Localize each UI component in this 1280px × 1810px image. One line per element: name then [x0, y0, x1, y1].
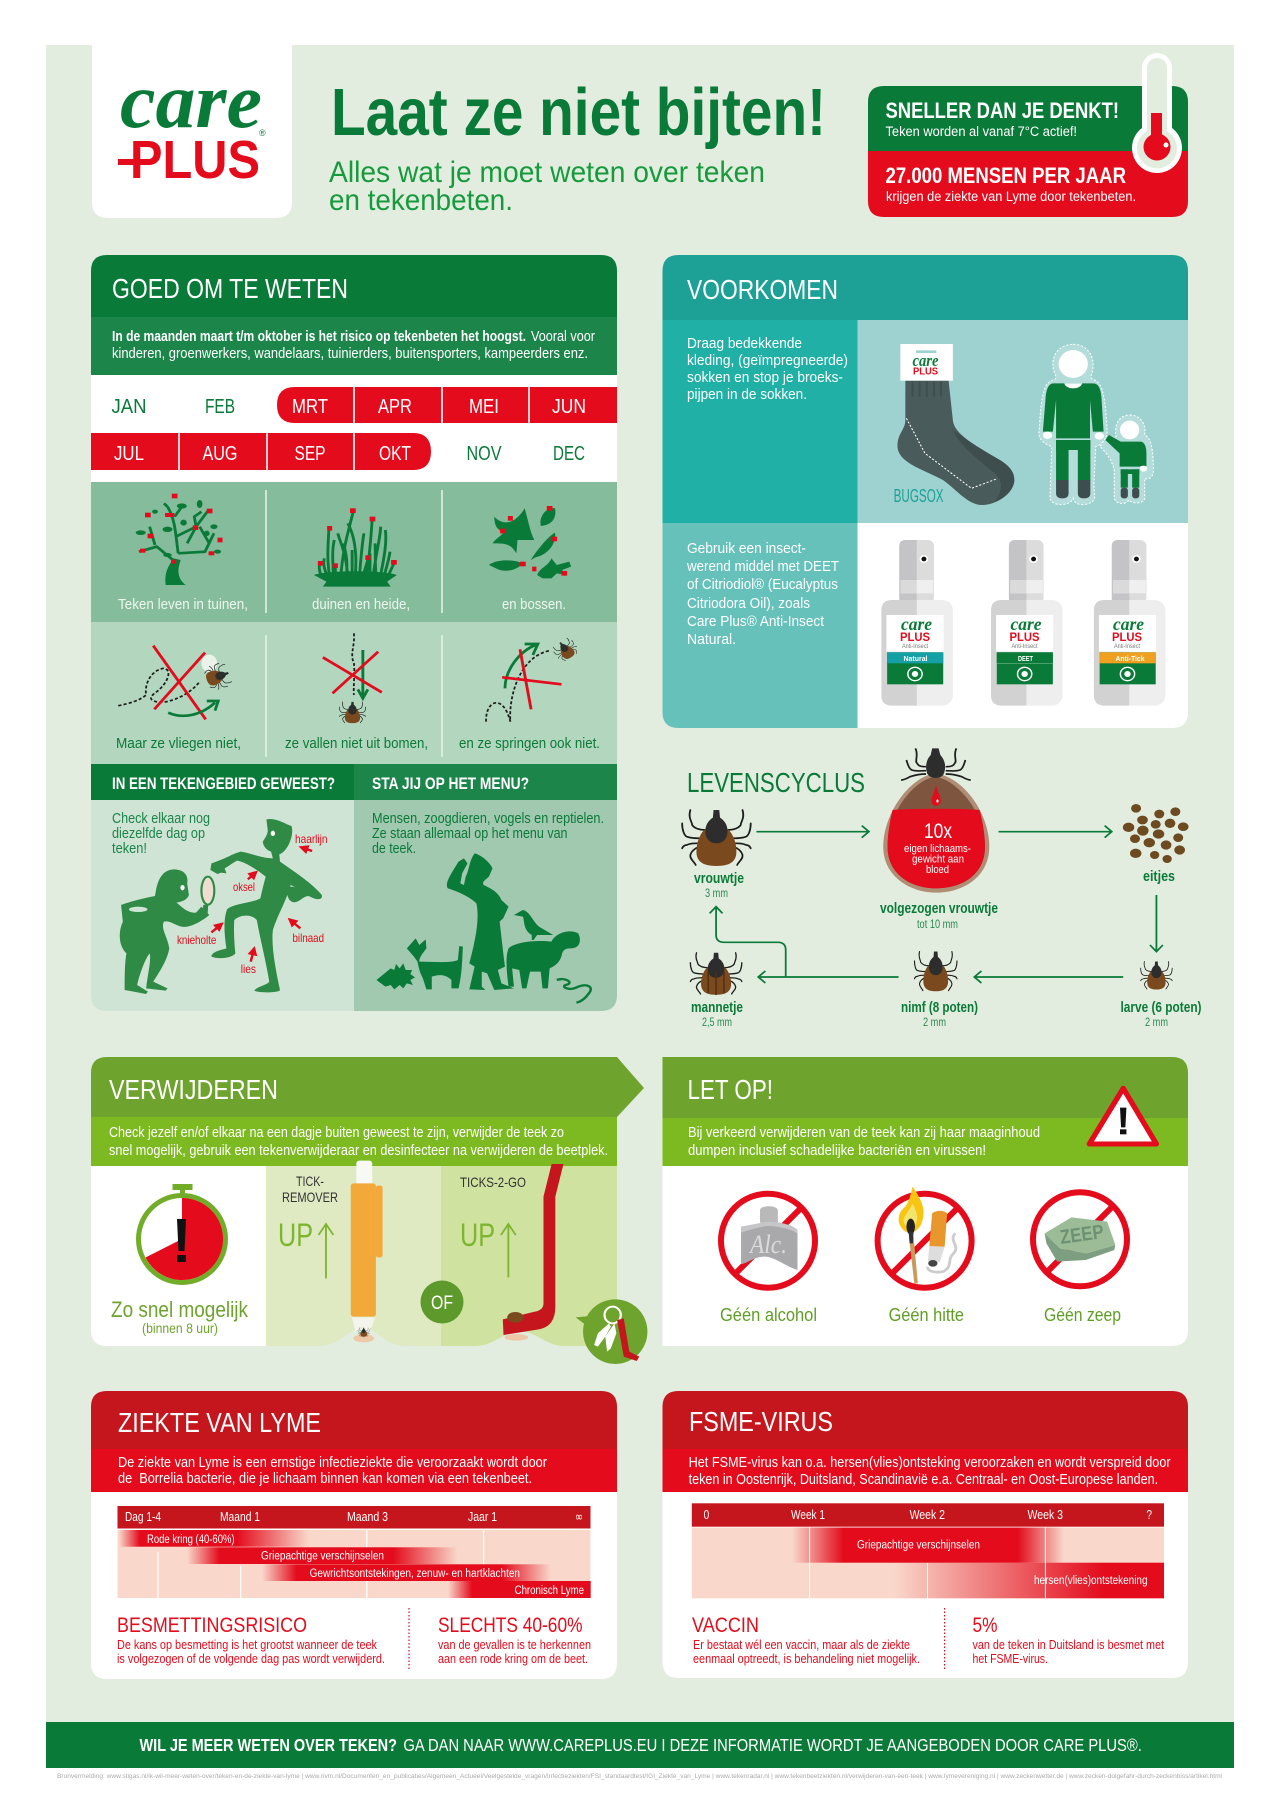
label row: where ticks live	[118, 596, 566, 613]
label row: what ticks do not do	[116, 735, 600, 752]
tool: tick remover: UP	[278, 1217, 313, 1253]
text block: risk months	[112, 329, 595, 362]
labels: do not use	[720, 1304, 1121, 1325]
illustration: bottle anti-tick: Anti-Tick	[1116, 654, 1145, 663]
illustration: bottle deet: care	[1010, 614, 1042, 634]
tool: tick remover	[278, 1161, 383, 1342]
chart: lyme timeline: Gewrichtsontstekingen, zenuw- en hartklachten	[310, 1568, 520, 1580]
icon: no heat	[878, 1187, 972, 1288]
icon: no alcohol: Alc.	[748, 1230, 787, 1259]
icon: ticks do not jump	[486, 637, 580, 722]
subpanel: sta jij op het menu: Mensen, zoogdieren, vogels en reptielen.	[372, 811, 604, 827]
illustration: bottle deet: Anti-Insect	[1012, 644, 1038, 650]
tool: ticks-2-go: UP	[460, 1217, 495, 1253]
text: zo snel mogelijk	[111, 1297, 249, 1336]
logo card: Care Plus: ®	[259, 128, 266, 138]
stage labels: 3 mm	[705, 886, 728, 900]
illustration: bottle anti-tick	[1094, 540, 1165, 706]
chart: lyme timeline: Griepachtige verschijnselen	[261, 1550, 384, 1562]
chart: fsme timeline: hersen(vlies)ontstekening	[1034, 1575, 1148, 1587]
illustration: bugsox sock: PLUS	[913, 366, 938, 378]
subtitle: Alles wat je moet weten over teken	[329, 156, 765, 189]
text block: risk months: Vooral voor	[531, 329, 595, 345]
stage labels: eitjes	[1143, 869, 1175, 885]
callout: temperature and Lyme figures	[868, 53, 1188, 217]
chart: month calendar: DEC	[553, 443, 585, 465]
text block: fsme description: teken in Oostenrijk, Duitsland, Scandinavië e.a. Centraal- en Oost-Europese landen.	[689, 1472, 1158, 1488]
text block: clothing advice: Draag bedekkende	[687, 335, 802, 352]
chart: month calendar: AUG	[202, 443, 238, 465]
icon: grass with ticks	[314, 508, 397, 587]
badge: of	[420, 1280, 464, 1324]
chart: fsme timeline: 0	[704, 1507, 709, 1522]
subpanel: in een tekengebied geweest: diezelfde dag op	[112, 826, 205, 842]
text block: warning	[688, 1125, 1040, 1159]
body part labels: knieholte	[177, 933, 217, 947]
footer banner: GA DAN NAAR WWW.CAREPLUS.EU I DEZE INFORMATIE WORDT JE AANGEBODEN DOOR CARE PLUS®.	[403, 1735, 1142, 1755]
icon: stopwatch	[138, 1184, 226, 1282]
text block: repellent advice: werend middel met DEET	[686, 558, 839, 575]
subpanel: sta jij op het menu: Ze staan allemaal op het menu van	[372, 826, 568, 842]
chart: fsme timeline: Week 3	[1028, 1507, 1063, 1522]
text block: repellent advice: Citriodora Oil), zoals	[687, 595, 810, 612]
illustration: two people checking for ticks	[120, 819, 322, 994]
chart: month calendar: MRT	[292, 396, 328, 418]
label row: what ticks do not do: Maar ze vliegen niet,	[116, 735, 241, 752]
stage labels: tot 10 mm	[917, 917, 958, 931]
heading: verwijderen: VERWIJDEREN	[109, 1074, 278, 1105]
heading: fsme-virus: FSME-VIRUS	[689, 1406, 833, 1437]
footer banner	[46, 1722, 1234, 1768]
text block: clothing advice: sokken en stop je broeks-	[687, 369, 843, 386]
label row: where ticks live: en bossen.	[502, 596, 566, 613]
panel: verwijderen	[91, 1057, 647, 1364]
illustration: bottle natural: PLUS	[900, 630, 930, 644]
title: Laat ze niet bijten!	[331, 75, 826, 150]
fact: 5%: 5%	[972, 1613, 998, 1637]
tool: tick remover: REMOVER	[282, 1189, 338, 1205]
fact: vaccin	[692, 1613, 920, 1666]
fact: vaccin: VACCIN	[692, 1613, 759, 1637]
panel: voorkomen	[662, 255, 1188, 728]
heading: levenscyclus: LEVENSCYCLUS	[687, 767, 865, 798]
chart: lyme timeline: Maand 3	[347, 1509, 388, 1524]
subtitle: en tekenbeten.	[329, 184, 513, 217]
panel: ziekte van lyme	[91, 1391, 617, 1679]
fact: vaccin: Er bestaat wél een vaccin, maar als de ziekte	[693, 1637, 910, 1652]
fact: besmettingsrisico	[117, 1613, 385, 1666]
labels: do not use: Géén alcohol	[720, 1304, 817, 1325]
chart: lyme timeline	[118, 1506, 591, 1598]
icon: thermometer	[1132, 53, 1182, 173]
chart: month calendar: FEB	[205, 396, 235, 418]
text block: fsme description	[689, 1455, 1171, 1488]
text block: warning: dumpen inclusief schadelijke bacteriën en virussen!	[688, 1143, 986, 1159]
blood meal text: bloed	[926, 864, 949, 876]
subpanel: in een tekengebied geweest: Check elkaar nog	[112, 811, 210, 827]
chart: month calendar: MEI	[469, 396, 499, 418]
stage labels: volgezogen vrouwtje	[880, 901, 998, 917]
logo card: Care Plus: PLUS	[130, 130, 260, 190]
chart: month calendar: NOV	[466, 443, 502, 465]
chart: month calendar: APR	[378, 396, 412, 418]
heading: let op: LET OP!	[688, 1074, 773, 1105]
text block: repellent advice: Natural.	[687, 631, 736, 648]
badge: of: OF	[431, 1293, 453, 1314]
tool: tick remover: TICK-	[296, 1173, 324, 1189]
fact: slechts 40-60%: SLECHTS 40-60%	[438, 1613, 582, 1637]
illustration: bugsox sock	[894, 344, 1014, 506]
fact: besmettingsrisico: is volgezogen of de volgende dag pas wordt verwijderd.	[117, 1651, 385, 1666]
chart: lyme timeline: Rode kring (40-60%)	[147, 1534, 235, 1546]
diagram: tick life stages	[682, 748, 1189, 995]
icon: tree with ticks	[136, 494, 222, 585]
text block: clothing advice: pijpen in de sokken.	[687, 386, 807, 403]
text block: lyme description	[118, 1455, 547, 1487]
text block: clothing advice	[687, 335, 848, 403]
tool: ticks-2-go	[460, 1164, 563, 1341]
chart: month calendar: OKT	[379, 443, 411, 465]
stage labels: 2,5 mm	[702, 1015, 732, 1029]
stage labels: nimf (8 poten)	[901, 1000, 978, 1016]
text block: lyme description: De ziekte van Lyme is een ernstige infectieziekte die veroorzaakt wordt door	[118, 1455, 547, 1471]
stage labels: mannetje	[691, 1000, 743, 1016]
text block: repellent advice	[686, 540, 839, 648]
illustration: bugsox sock: BUGSOX	[894, 486, 944, 506]
callout: temperature and Lyme figures: SNELLER DAN JE DENKT!	[886, 98, 1119, 123]
illustration: adult and child in covering clothes	[1039, 344, 1154, 505]
stage labels	[691, 869, 1202, 1029]
chart: lyme timeline: Maand 1	[220, 1509, 260, 1524]
fact: 5%	[972, 1613, 1164, 1666]
chart: lyme timeline: ∞	[575, 1510, 583, 1525]
text block: risk months: kinderen, groenwerkers, wandelaars, tuinierders, buitensporters, kampeerders enz.	[112, 346, 588, 362]
fact: slechts 40-60%	[438, 1613, 591, 1666]
body part labels	[177, 832, 328, 976]
text block: repellent advice: of Citriodiol® (Eucalyptus	[687, 576, 838, 593]
subpanel: in een tekengebied geweest: teken!	[112, 841, 147, 857]
chart: lyme timeline: Dag 1-4	[125, 1509, 161, 1524]
tool: ticks-2-go: TICKS-2-GO	[460, 1174, 526, 1190]
chart: lyme timeline: Jaar 1	[468, 1509, 497, 1524]
icon: keychain tool	[576, 1299, 647, 1364]
text block: risk months: In de maanden maart t/m oktober is het risico op tekenbeten het hoogst.	[112, 329, 526, 345]
text: zo snel mogelijk: Zo snel mogelijk	[111, 1297, 249, 1322]
source line: Bronvermelding: www.stigas.nl/ik-wil-meer-weten-over/teken-en-de-ziekte-van-lyme | www.rivm.nl/Documenten_en_publicaties/Algemeen_Actueel/Veelgestelde_vragen/Infectieziekten/FSI_standaardtest/IGI_Ziekte_van_Lyme | www.tekenradar.nl | www.tekenbeetziekten.nl/verwijderen-van-een-teek | www.lymevereniging.nl | www.zeckenwetter.de | www.zecken-dolgefahr-durch-zeckenbiss/artikel.html	[57, 1773, 1223, 1780]
chart: month calendar	[91, 387, 617, 470]
label row: what ticks do not do: ze vallen niet uit bomen,	[285, 735, 428, 752]
logo card: Care Plus: care	[120, 57, 262, 144]
illustration: bottle anti-tick: Anti-Insect	[1114, 644, 1140, 650]
label row: where ticks live: duinen en heide,	[312, 596, 410, 613]
fact: besmettingsrisico: De kans op besmetting is het grootst wanneer de teek	[117, 1637, 377, 1652]
label row: where ticks live: Teken leven in tuinen,	[118, 596, 248, 613]
panel: let op	[662, 1057, 1188, 1346]
body part labels: lies	[241, 962, 256, 976]
illustration: bugsox sock: care	[912, 351, 939, 370]
stage labels: larve (6 poten)	[1120, 1000, 1202, 1016]
stage labels: 2 mm	[923, 1015, 946, 1029]
text: zo snel mogelijk: (binnen 8 uur)	[142, 1320, 218, 1336]
chart: fsme timeline	[692, 1503, 1164, 1598]
footer banner: WIL JE MEER WETEN OVER TEKEN?	[140, 1735, 397, 1755]
chart: lyme timeline: Chronisch Lyme	[515, 1585, 584, 1597]
illustration: bottle deet: DEET	[1018, 654, 1033, 663]
fact: 5%: van de teken in Duitsland is besmet met	[972, 1637, 1164, 1652]
icon: leaves with ticks	[489, 506, 571, 578]
text block: clothing advice: kleding, (geïmpregneerde)	[687, 352, 848, 369]
stage labels: vrouwtje	[694, 871, 744, 887]
text block: removal advice: Check jezelf en/of elkaar na een dagje buiten geweest te zijn, verwijder de teek zo	[109, 1125, 564, 1141]
subpanel: sta jij op het menu: de teek.	[372, 841, 416, 857]
chart: fsme timeline: Week 1	[791, 1507, 825, 1522]
panel: fsme-virus	[662, 1391, 1188, 1678]
text block: warning: Bij verkeerd verwijderen van de teek kan zij haar maaginhoud	[688, 1125, 1040, 1141]
body part labels: oksel	[233, 880, 255, 894]
text block: lyme description: de Borrelia bacterie, die je lichaam binnen kan komen via een tekenbeet.	[118, 1471, 532, 1487]
subpanel: in een tekengebied geweest: IN EEN TEKENGEBIED GEWEEST?	[112, 774, 335, 793]
callout: temperature and Lyme figures: 27.000 MENSEN PER JAAR	[886, 163, 1126, 188]
heading: goed om te weten: GOED OM TE WETEN	[112, 273, 348, 304]
illustration: bottle anti-tick: care	[1113, 614, 1144, 634]
text block: fsme description: Het FSME-virus kan o.a. hersen(vlies)ontsteking veroorzaken en wordt verspreid door	[689, 1455, 1171, 1471]
text block: repellent advice: Care Plus® Anti-Insect	[687, 613, 825, 630]
fact: vaccin: eenmaal optreedt, is behandeling niet mogelijk.	[693, 1651, 920, 1666]
fact: slechts 40-60%: van de gevallen is te herkennen	[438, 1637, 591, 1652]
blood meal text: eigen lichaams-	[904, 843, 971, 855]
text block: removal advice: snel mogelijk, gebruik een tekenverwijderaar en desinfecteer na verwijderen de beetplek.	[109, 1143, 608, 1159]
subtitle	[329, 156, 765, 217]
chart: fsme timeline: Week 2	[910, 1507, 945, 1522]
heading: ziekte van lyme: ZIEKTE VAN LYME	[118, 1407, 321, 1438]
icon: no soap: ZEEP	[1059, 1221, 1105, 1249]
subpanel: sta jij op het menu: STA JIJ OP HET MENU?	[372, 774, 529, 793]
chart: fsme timeline: Griepachtige verschijnselen	[857, 1540, 980, 1552]
icon: no alcohol	[721, 1194, 815, 1288]
labels: do not use: Géén hitte	[889, 1304, 964, 1325]
blood meal text	[904, 820, 971, 876]
stage labels: 2 mm	[1145, 1015, 1168, 1029]
text block: removal advice	[109, 1125, 608, 1159]
heading: voorkomen: VOORKOMEN	[687, 274, 838, 305]
chart: month calendar: JUN	[552, 396, 586, 418]
chart: month calendar: JAN	[112, 396, 146, 418]
panel: levenscyclus	[682, 748, 1202, 1029]
illustration: bottle deet: PLUS	[1010, 630, 1040, 644]
body part labels: bilnaad	[292, 931, 324, 945]
illustration: person and animals silhouettes	[376, 853, 591, 1003]
fact: besmettingsrisico: BESMETTINGSRISICO	[117, 1613, 307, 1637]
illustration: bottle natural: Anti-Insect	[902, 644, 928, 650]
blood meal text: gewicht aan	[912, 854, 964, 866]
label row: what ticks do not do: en ze springen ook niet.	[459, 735, 600, 752]
chart: month calendar: JUL	[114, 443, 144, 465]
callout: temperature and Lyme figures: Teken worden al vanaf 7°C actief!	[886, 124, 1077, 139]
subpanel: in een tekengebied geweest	[91, 764, 354, 1011]
icon: warning triangle	[1089, 1088, 1156, 1144]
icon: ticks do not fall	[323, 633, 382, 723]
callout: temperature and Lyme figures: krijgen de ziekte van Lyme door tekenbeten.	[886, 189, 1136, 204]
labels: do not use: Géén zeep	[1044, 1304, 1121, 1325]
logo card: Care Plus	[92, 45, 292, 218]
text block: repellent advice: Gebruik een insect-	[687, 540, 806, 557]
fact: slechts 40-60%: aan een rode kring om de beet.	[438, 1651, 588, 1666]
illustration: bottle anti-tick: PLUS	[1112, 630, 1142, 644]
body part labels: haarlijn	[295, 832, 328, 846]
icon: no soap	[1033, 1192, 1127, 1286]
chart: fsme timeline: ?	[1146, 1507, 1152, 1522]
illustration: bottle natural: Natural	[904, 654, 928, 663]
illustration: bottle natural	[881, 540, 953, 706]
icon: ticks do not fly	[118, 646, 233, 719]
illustration: bottle deet	[991, 540, 1062, 706]
illustration: bottle natural: care	[901, 614, 932, 634]
blood meal text: 10x	[924, 820, 952, 843]
fact: 5%: het FSME-virus.	[972, 1651, 1048, 1666]
subpanel: sta jij op het menu	[354, 764, 617, 1011]
chart: month calendar: SEP	[294, 443, 326, 465]
panel: goed om te weten	[91, 255, 617, 1011]
